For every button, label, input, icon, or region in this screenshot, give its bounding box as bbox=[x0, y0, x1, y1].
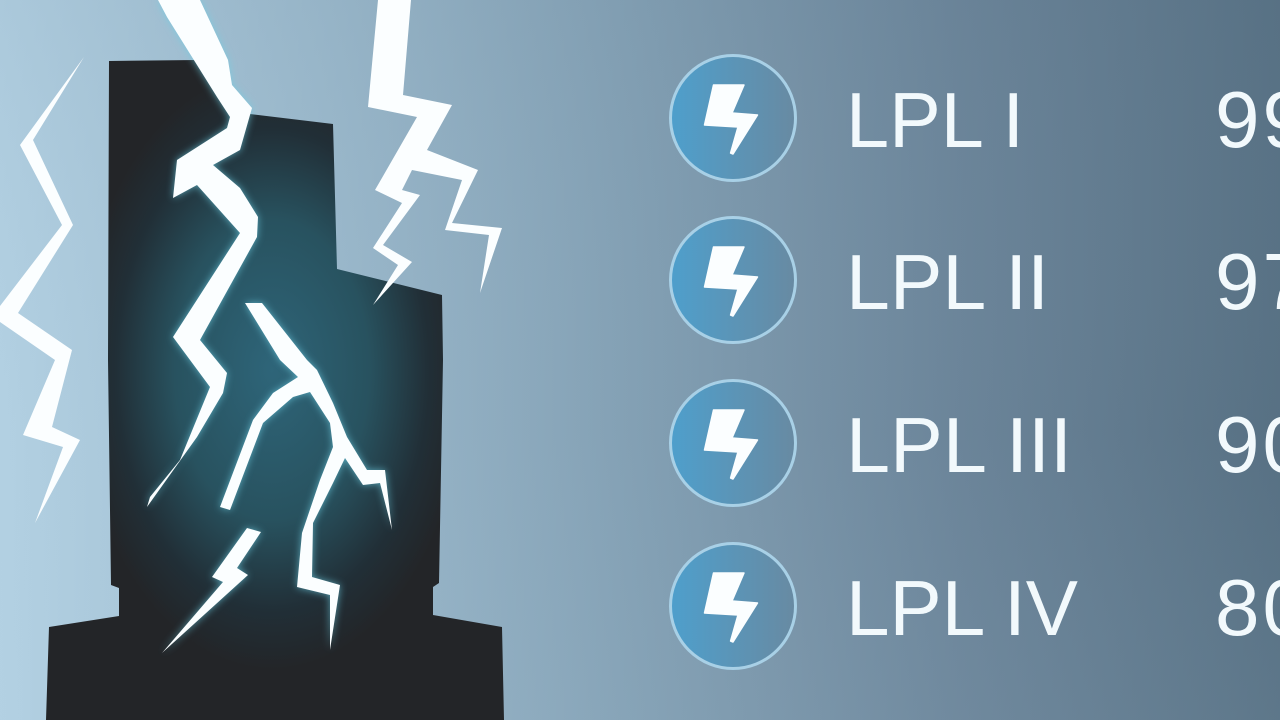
lightning bolt: far left bbox=[0, 57, 84, 523]
label: LPL IV bbox=[846, 564, 1078, 652]
label: LPL III bbox=[846, 401, 1072, 489]
protection level row: LPL III bbox=[670, 380, 1280, 506]
label: LPL II bbox=[846, 238, 1049, 326]
icon: lightning disc bbox=[670, 56, 796, 180]
protection level row: LPL IV bbox=[670, 544, 1280, 668]
icon: lightning disc bbox=[670, 544, 796, 668]
building silhouette bbox=[46, 60, 504, 720]
icon: lightning disc bbox=[670, 380, 796, 506]
icon: lightning disc bbox=[670, 218, 796, 342]
protection level row: LPL II bbox=[670, 218, 1280, 342]
label: LPL I bbox=[846, 76, 1024, 164]
lightning bolt: upper right bbox=[368, 0, 502, 305]
lightning bolts striking the building bbox=[147, 0, 392, 653]
protection level row: LPL I bbox=[670, 56, 1280, 180]
